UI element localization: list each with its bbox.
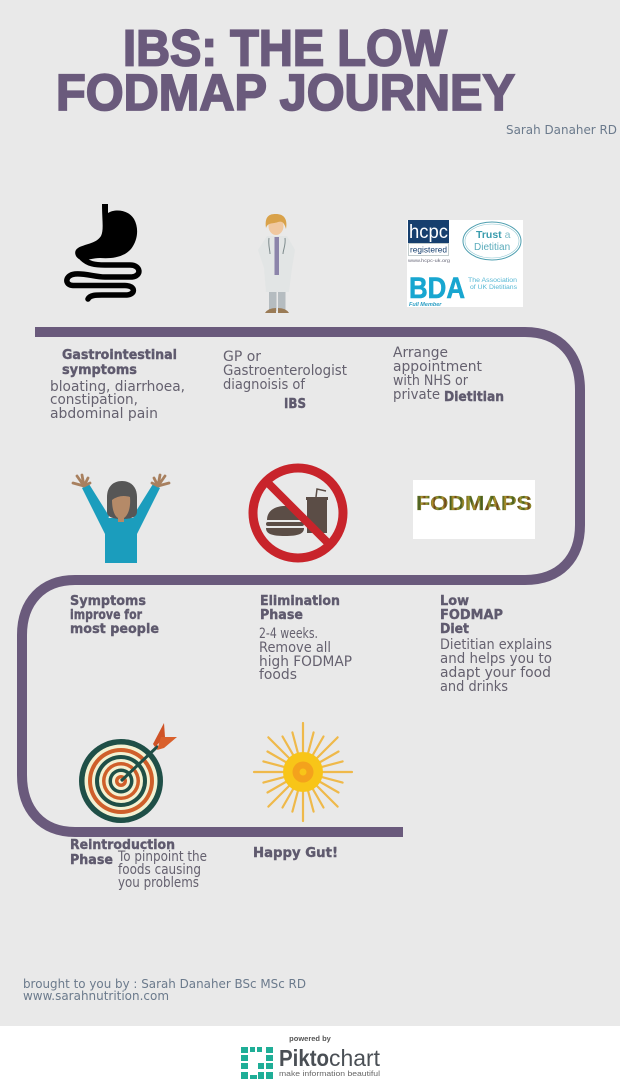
text: reintroduction phase: Reintroduction [70,837,175,853]
text: gastrointestinal symptoms [50,347,185,422]
text: elimination phase: Remove all [259,640,331,656]
logos: professional memberships: Dietitian [474,242,510,253]
text: low FODMAP diet: and drinks [440,679,508,695]
logos: professional memberships: Trust a [476,229,511,241]
text: GP diagnosis: IBS [284,396,306,412]
Piktochart branding: Pikto [279,1045,329,1071]
text: GP diagnosis: GP or [223,349,261,365]
text: elimination phase: Phase [260,607,303,623]
text: happy gut: Happy Gut! [253,845,338,861]
text: gastrointestinal symptoms: symptoms [62,362,137,378]
logos: professional memberships: www.hcpc-uk.org [408,258,450,264]
footer credit: brought to you by : Sarah Danaher BSc MSc RD [23,976,306,991]
text: gastrointestinal symptoms: Gastrointestinal [62,347,177,363]
text: symptoms improve: Symptoms [70,593,146,609]
text: arrange dietitian appointment: with NHS or [393,373,468,389]
icon: sun [254,723,352,821]
text: reintroduction phase [70,837,207,891]
text: arrange dietitian appointment: appointment [393,359,482,375]
logo: FODMAPS: FODMAPS [416,493,532,515]
logos: professional memberships [407,220,523,308]
text: arrange dietitian appointment: Dietitian [444,389,504,405]
text: low FODMAP diet: Low [440,593,469,609]
icon: doctor [258,214,295,313]
logos: professional memberships: BDA [409,272,465,305]
Piktochart branding: powered by [289,1034,332,1043]
text: symptoms improve [70,593,159,637]
icon: no food or drink [253,468,343,558]
logos: professional memberships: of UK Dietitians [470,284,518,291]
text: gastrointestinal symptoms: bloating, diarrhoea, [50,379,185,395]
author credit: Sarah Danaher RD [506,122,617,137]
logos: professional memberships: Full Member [409,302,442,308]
text: GP diagnosis: Gastroenterologist [223,363,347,379]
footer credit: www.sarahnutrition.com [23,988,169,1003]
icon: person with raised arms [73,475,169,563]
logos: professional memberships: hcpc [409,222,448,243]
text: low FODMAP diet: FODMAP [440,607,503,623]
text: symptoms improve: improve for [70,607,142,623]
logos: professional memberships: registered [410,244,447,254]
text: elimination phase: Elimination [260,593,340,609]
text: reintroduction phase: To pinpoint the [117,849,207,865]
text: elimination phase: foods [259,667,297,683]
text: elimination phase: high FODMAP [259,654,352,670]
Piktochart branding [241,1034,381,1079]
logos: professional memberships: The Association [468,277,517,284]
journey path [22,332,580,832]
text: low FODMAP diet [440,593,552,695]
text: GP diagnosis [223,349,347,412]
text: reintroduction phase: Phase [70,852,113,868]
footer credit [23,976,306,1003]
text: arrange dietitian appointment: private [393,387,440,403]
icon: target with arrow [79,723,177,823]
title: IBS: THE LOW [123,20,448,76]
text: low FODMAP diet: Diet [440,621,469,637]
text: elimination phase: 2-4 weeks. [259,626,318,642]
title [56,20,515,121]
text: reintroduction phase: you problems [118,875,199,891]
icon: digestive system [67,204,139,299]
logo: FODMAPS [413,480,535,539]
text: gastrointestinal symptoms: abdominal pain [50,406,158,422]
text: arrange dietitian appointment: Arrange [393,345,448,361]
text: gastrointestinal symptoms: constipation, [50,392,138,408]
Piktochart branding: make information beautiful [279,1069,380,1078]
title: FODMAP JOURNEY [56,64,515,121]
text: low FODMAP diet: adapt your food [440,665,551,681]
Piktochart branding: chart [329,1045,381,1071]
text: low FODMAP diet: Dietitian explains [440,637,552,653]
text: low FODMAP diet: and helps you to [440,651,552,667]
text: GP diagnosis: diagnoisis of [223,377,306,393]
text: arrange dietitian appointment [393,345,504,405]
text: reintroduction phase: foods causing [118,862,201,878]
text: elimination phase [259,593,352,683]
text: symptoms improve: most people [70,621,159,637]
